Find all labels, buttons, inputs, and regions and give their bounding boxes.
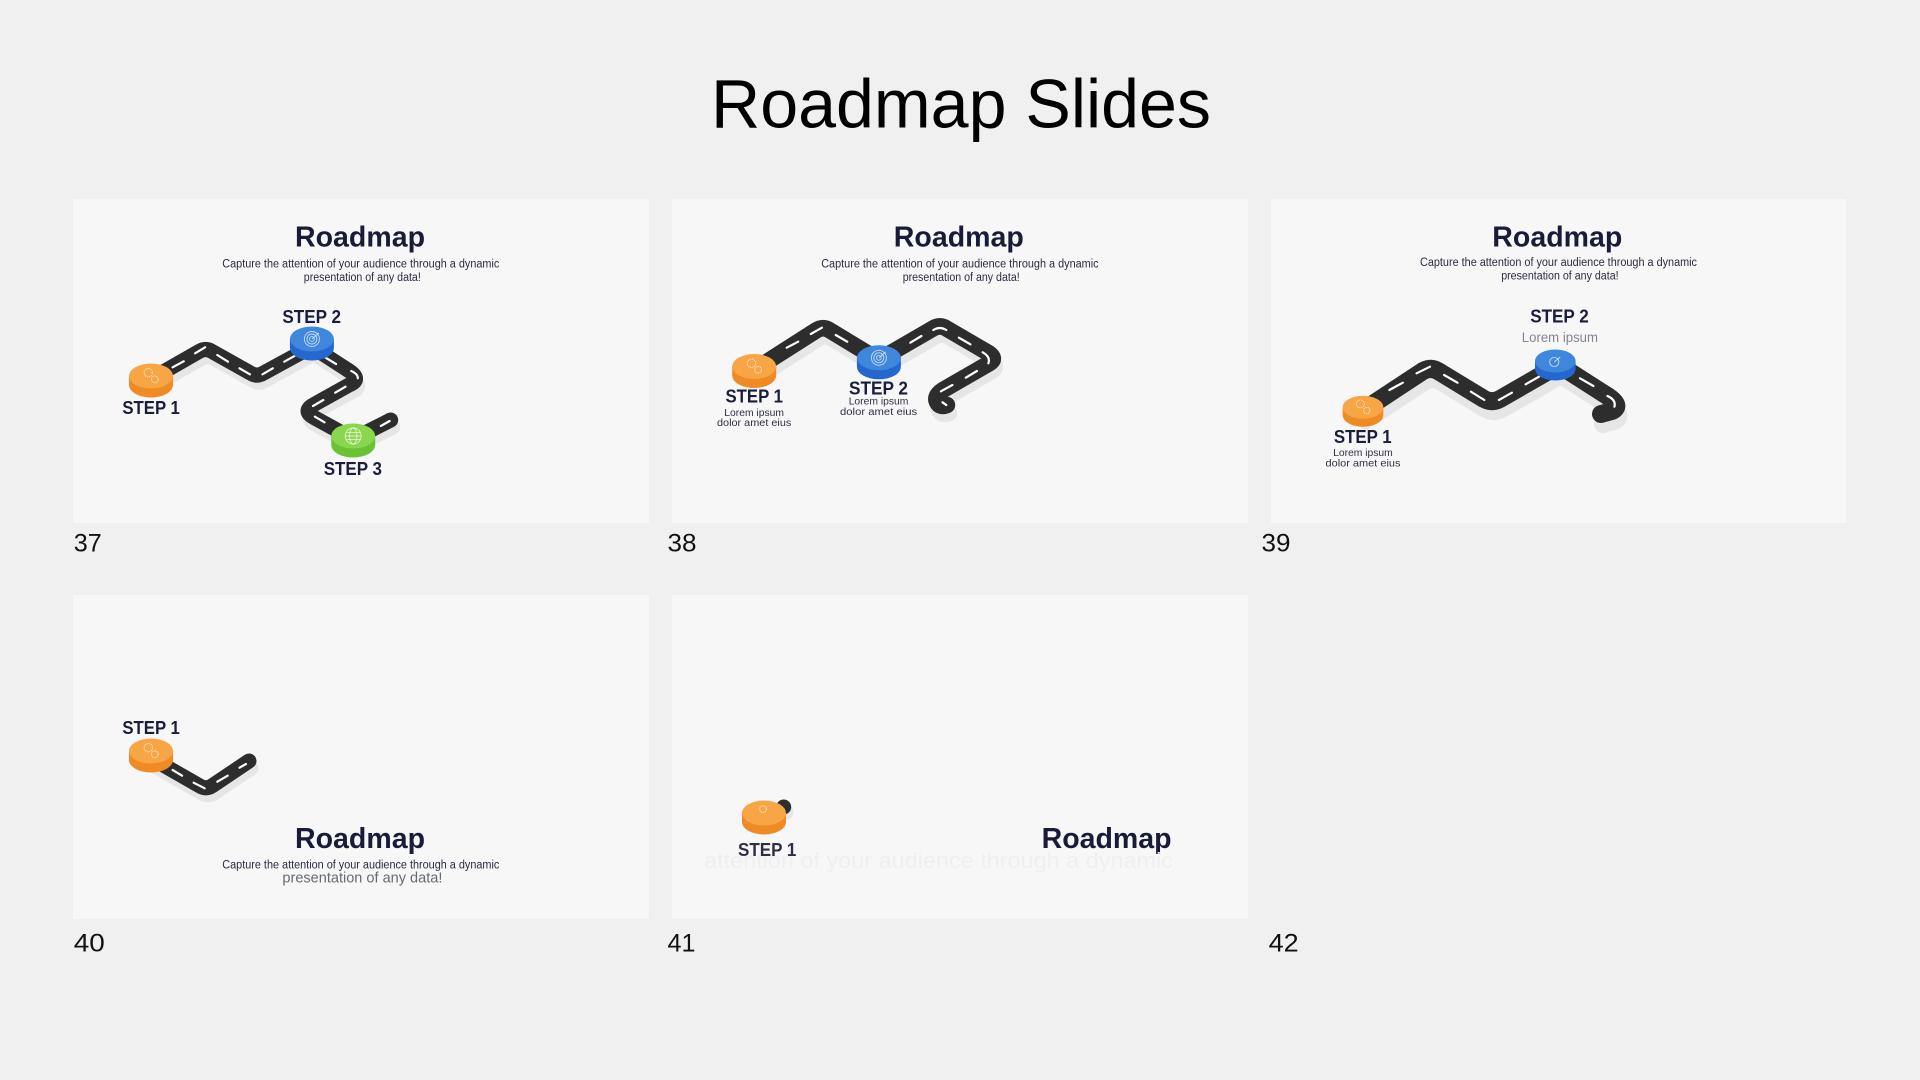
icon: blue target disc bbox=[857, 345, 901, 379]
text block: slide 40 subtitle: Capture the attention of your audience through a dynamic bbox=[222, 860, 500, 872]
text block: slide 37 subtitle bbox=[222, 258, 500, 284]
heading: slide 40: Roadmap bbox=[295, 823, 425, 855]
label: step 1 with description bbox=[717, 385, 791, 429]
panel: slide 38 bbox=[672, 199, 1248, 523]
slide number 40: 40 bbox=[74, 930, 105, 958]
icon: blue target disc bbox=[290, 326, 334, 360]
icon: blue target disc bbox=[1535, 350, 1576, 380]
text block: slide 38 subtitle bbox=[821, 258, 1099, 284]
label: step 3: STEP 3 bbox=[324, 458, 382, 479]
heading: slide 38: Roadmap bbox=[894, 221, 1024, 253]
panel: slide 37 bbox=[73, 199, 649, 523]
panel: slide 40 bbox=[73, 595, 649, 919]
label: step 1: STEP 1 bbox=[122, 397, 180, 418]
icon: green globe disc bbox=[331, 424, 375, 458]
label: step 1: STEP 1 bbox=[738, 839, 796, 860]
label: step 1 with description: STEP 1 bbox=[1334, 426, 1392, 447]
text block: slide 40 subtitle bbox=[222, 860, 500, 886]
icon: orange gears disc bbox=[732, 354, 776, 388]
icon: orange gear disc bbox=[742, 800, 786, 834]
icon: orange gears disc bbox=[129, 364, 173, 398]
label: step 1 with description: Lorem ipsum bbox=[724, 407, 784, 419]
panel: slide 41 bbox=[672, 595, 1248, 919]
icon: orange gears disc bbox=[1343, 396, 1383, 427]
label: step 2 with description: STEP 2 bbox=[1530, 305, 1589, 326]
heading: slide 37: Roadmap bbox=[295, 221, 425, 253]
slide number 37: 37 bbox=[74, 530, 102, 558]
panel: slide 39 bbox=[1271, 199, 1846, 523]
label: step 2 with description: Lorem ipsum bbox=[1522, 329, 1598, 345]
slide number 39: 39 bbox=[1262, 530, 1290, 558]
label: step 1 with description: dolor amet eius bbox=[717, 417, 791, 429]
label: step 1 with description: STEP 1 bbox=[726, 385, 783, 406]
label: step 2: STEP 2 bbox=[282, 306, 341, 327]
label: step 2 with description: STEP 2 bbox=[849, 378, 908, 398]
text block: slide 39 subtitle bbox=[1420, 257, 1697, 282]
heading: slide 41: Roadmap bbox=[1042, 823, 1172, 855]
label: step 2 with description: dolor amet eius bbox=[840, 406, 917, 418]
label: step 2 with description bbox=[840, 378, 917, 418]
label: step 2 with description bbox=[1522, 305, 1598, 345]
text block: faded subtitle: attention of your audience through a dynamic bbox=[704, 848, 1173, 873]
text block: slide 39 subtitle: presentation of any data! bbox=[1501, 270, 1619, 282]
road: slide 38 bbox=[754, 326, 995, 414]
label: step 1 with description bbox=[1326, 426, 1400, 470]
slide number 41: 41 bbox=[668, 930, 696, 958]
label: step 2 with description: Lorem ipsum bbox=[849, 396, 909, 408]
label: step 1 with description: Lorem ipsum bbox=[1333, 447, 1393, 459]
slide number 42: 42 bbox=[1269, 930, 1299, 958]
label: step 1: STEP 1 bbox=[122, 717, 180, 738]
text block: slide 38 subtitle: presentation of any data! bbox=[903, 272, 1020, 284]
title: Roadmap Slides bbox=[711, 66, 1211, 143]
label: step 1 with description: dolor amet eius bbox=[1326, 458, 1400, 470]
text block: slide 39 subtitle: Capture the attention of your audience through a dynamic bbox=[1420, 257, 1697, 269]
text block: slide 38 subtitle: Capture the attention of your audience through a dynamic bbox=[821, 258, 1099, 270]
road: slide 37 bbox=[152, 347, 393, 446]
heading: slide 39: Roadmap bbox=[1492, 221, 1622, 253]
road: slide 40 bbox=[151, 758, 251, 795]
slide number 38: 38 bbox=[668, 530, 696, 558]
text block: slide 40 subtitle: presentation of any data! bbox=[282, 870, 442, 886]
text block: slide 37 subtitle: Capture the attention of your audience through a dynamic bbox=[222, 258, 500, 270]
road: slide 39 bbox=[1364, 365, 1618, 424]
road stub: slide 41 bbox=[776, 800, 794, 820]
text block: slide 37 subtitle: presentation of any data! bbox=[304, 272, 421, 284]
icon: orange gears disc bbox=[129, 738, 173, 772]
